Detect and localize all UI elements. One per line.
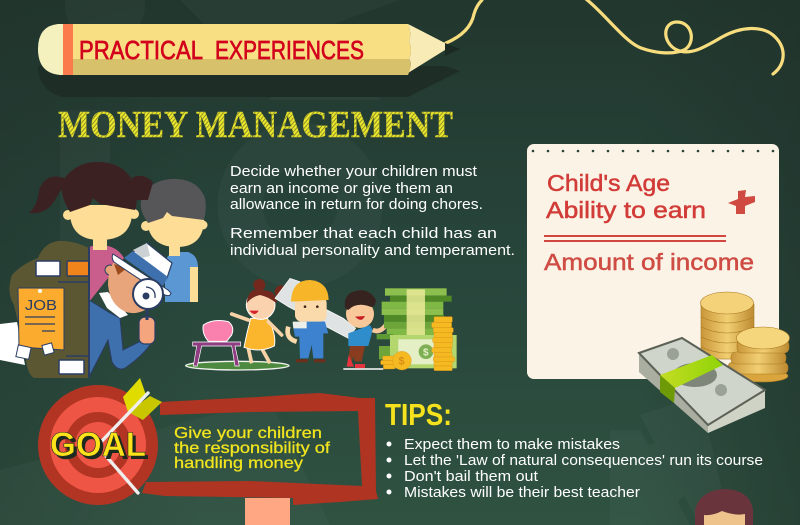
formula text bbox=[544, 170, 754, 275]
job note bbox=[16, 288, 64, 359]
worker with wrench bbox=[275, 278, 356, 362]
girl bbox=[29, 162, 153, 302]
illustration: girl and boy bbox=[29, 162, 208, 302]
goal target: GOAL bbox=[50, 426, 146, 464]
illustration: piggy bank, children and cash: $ bbox=[399, 356, 405, 368]
pencil eraser bbox=[38, 24, 63, 75]
person at bottom right bbox=[695, 489, 753, 525]
goal target bbox=[38, 378, 162, 505]
tips list: Let the 'Law of natural consequences' run its course bbox=[404, 452, 763, 469]
fraction lines bbox=[544, 236, 726, 241]
formula text: Amount of income bbox=[544, 249, 754, 275]
goal frame bbox=[142, 393, 378, 505]
text block: introduction: individual personality and temperament. bbox=[230, 242, 515, 259]
text block: introduction: Remember that each child has an bbox=[230, 225, 497, 242]
tips list: Mistakes will be their best teacher bbox=[404, 484, 640, 501]
girl with piggy bank bbox=[186, 279, 289, 370]
formula text: Ability to earn bbox=[546, 197, 706, 223]
goal text: the responsibility of bbox=[174, 440, 331, 457]
detective bbox=[89, 243, 172, 378]
pencil title bbox=[79, 35, 364, 65]
pencil title: PRACTICAL bbox=[79, 35, 203, 65]
pencil shadow bbox=[38, 66, 460, 97]
boy bbox=[141, 179, 208, 302]
arrow bbox=[98, 378, 162, 493]
goal text bbox=[174, 425, 331, 472]
formula text: Child's Age bbox=[547, 170, 670, 196]
peach figure neck bbox=[245, 498, 290, 525]
pencil body bbox=[73, 24, 411, 59]
card punch holes bbox=[532, 150, 774, 152]
board notes bbox=[0, 261, 89, 374]
panel: income formula card bbox=[527, 144, 779, 379]
tips list bbox=[386, 436, 763, 501]
text block: introduction: earn an income or give them an bbox=[230, 180, 453, 197]
illustration: piggy bank, children and cash bbox=[186, 278, 457, 371]
olive board bbox=[9, 241, 89, 378]
job note: JOB bbox=[25, 297, 57, 314]
pencil title: EXPERIENCES bbox=[215, 35, 364, 65]
pencil heading bbox=[38, 24, 460, 97]
goal text: Give your children bbox=[174, 425, 322, 442]
cash stack: $ bbox=[423, 347, 429, 358]
icon: stack of cash bbox=[639, 338, 765, 433]
squiggle line bbox=[446, 0, 783, 74]
cash stack bbox=[377, 288, 457, 368]
tips heading: TIPS: bbox=[385, 397, 452, 432]
text block: introduction: allowance in return for doing chores. bbox=[230, 196, 483, 213]
goal text: handling money bbox=[174, 455, 303, 472]
text block: introduction bbox=[230, 163, 515, 259]
boy bbox=[343, 290, 386, 369]
illustration: detective with job board bbox=[0, 241, 172, 378]
text block: introduction: Decide whether your children must bbox=[230, 163, 478, 180]
gold coins bbox=[381, 317, 455, 371]
icon: gold coins bbox=[700, 292, 790, 382]
tips list: Don't bail them out bbox=[404, 468, 539, 485]
pencil tip bbox=[408, 24, 445, 73]
target rings bbox=[38, 385, 158, 505]
title: money management: MONEY MANAGEMENT bbox=[58, 104, 453, 146]
goal label: GOAL bbox=[53, 429, 149, 467]
tips list: Expect them to make mistakes bbox=[404, 436, 620, 453]
plus sign bbox=[728, 190, 755, 214]
